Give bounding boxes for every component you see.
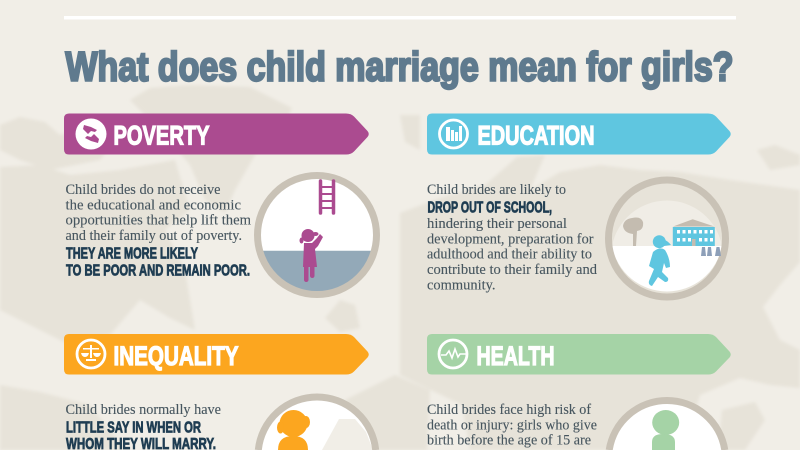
heading: health: HEALTH: [476, 341, 554, 371]
text: poverty: TO BE POOR AND REMAIN POOR.: [66, 262, 250, 280]
text: education: Child brides are likely to: [427, 182, 566, 198]
text: inequality: LITTLE SAY IN WHEN OR: [66, 420, 201, 437]
banner: health: [427, 334, 731, 374]
heading: education: EDUCATION: [478, 120, 594, 150]
panel: education: [427, 114, 731, 297]
text: health: birth before the age of 15 are: [427, 433, 591, 449]
banner: inequality: [64, 334, 369, 374]
text: poverty: and their family out of poverty.: [66, 228, 242, 244]
panel: poverty: [64, 114, 376, 294]
tree: [623, 218, 643, 246]
small children: [701, 247, 721, 256]
icon: books: [440, 120, 468, 148]
illustration: girl walking away from school: [608, 180, 726, 297]
text: poverty: the educational and economic: [66, 197, 241, 213]
girl: [277, 410, 310, 450]
girl: [300, 229, 323, 282]
text: education: hindering their personal: [427, 216, 567, 232]
icon: scales of justice: [77, 340, 105, 368]
text: poverty: Child brides do not receive: [66, 182, 220, 198]
text: education: contribute to their family and: [427, 262, 598, 278]
text: poverty: THEY ARE MORE LIKELY: [66, 246, 198, 262]
illustration: girl: [609, 401, 725, 450]
heading: poverty: POVERTY: [114, 120, 210, 150]
ladder: [320, 181, 334, 213]
text: poverty: opportunities that help lift them: [66, 213, 252, 229]
text: education: DROP OUT OF SCHOOL,: [428, 200, 552, 216]
text: inequality: Child brides normally have: [66, 402, 221, 418]
text: inequality: [66, 402, 221, 450]
illustration: girl: [258, 397, 376, 450]
text: education: community.: [427, 277, 496, 293]
text: health: [427, 402, 597, 449]
text: health: Child brides face high risk of: [427, 402, 591, 418]
banner: poverty: [64, 114, 369, 154]
girl: [652, 410, 679, 450]
heading: inequality: INEQUALITY: [114, 341, 238, 371]
text: health: death or injury: girls who give: [427, 417, 597, 433]
text: poverty: [66, 182, 252, 280]
text: education: development, preparation for: [427, 231, 594, 247]
text: education: adulthood and their ability to: [427, 247, 592, 263]
school building: [673, 219, 715, 246]
icon: helping hands: [76, 118, 106, 150]
text: education: [427, 182, 598, 293]
illustration: girl reaching for ladder: [258, 176, 376, 294]
panel: inequality: [64, 334, 376, 450]
banner: education: [427, 114, 731, 154]
girl: [649, 235, 671, 286]
top rule: [64, 16, 736, 20]
panel: health: [427, 334, 731, 450]
icon: heartbeat: [439, 340, 467, 368]
